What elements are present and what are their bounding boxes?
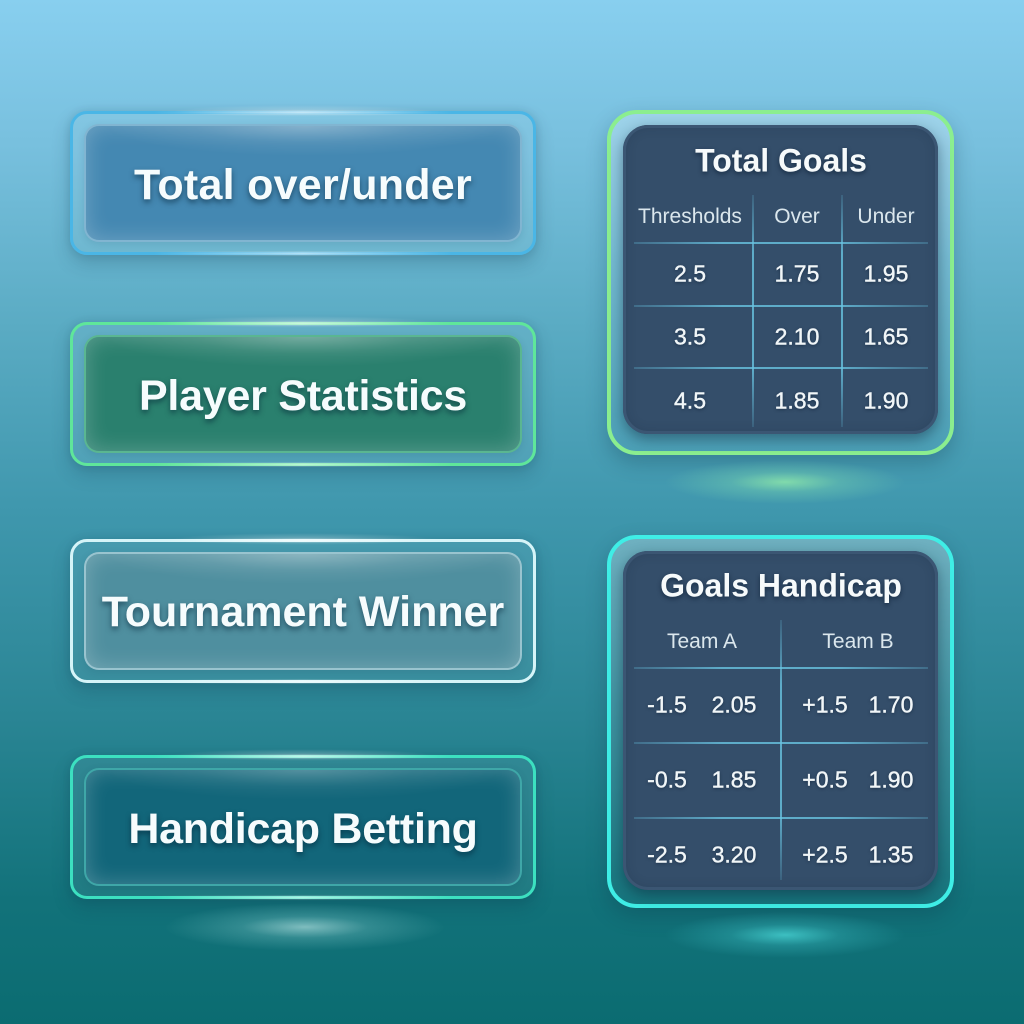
row: 1.5: 1.70 [869, 692, 913, 718]
row: 3.5: 1.65 [864, 324, 908, 350]
header row [638, 205, 915, 228]
row: 2.5 [674, 260, 908, 286]
button: Player Statistics: Player Statistics [139, 372, 467, 420]
button: Total over/under: Total over/under [134, 161, 472, 209]
row: 4.5 [674, 388, 908, 414]
row: 1.5: 2.05 [712, 692, 756, 718]
row: 3.5: 2.10 [775, 324, 819, 350]
row: 0.5: +0.5 [802, 766, 848, 792]
table card: Goals Handicap [607, 535, 954, 908]
row: 2.5: 1.75 [775, 260, 819, 286]
table card: Total Goals [607, 110, 954, 455]
row: 3.5 [674, 324, 908, 350]
row: 2.5: 1.95 [864, 260, 908, 286]
row: 1.5: -1.5 [647, 692, 687, 718]
button: Handicap Betting: Handicap Betting [128, 805, 478, 853]
row: 2.5: -2.5 [647, 842, 687, 868]
row: 4.5: 1.90 [864, 388, 908, 414]
table title: Total Goals: Total Goals [695, 142, 867, 178]
row: 2.5: 3.20 [712, 842, 756, 868]
glow under total goals card [665, 460, 905, 504]
row: 0.5: -0.5 [647, 766, 687, 792]
row: 2.5: 2.5 [674, 260, 706, 286]
row: 4.5: 1.85 [775, 388, 819, 414]
button: Handicap Betting [70, 755, 536, 899]
row: 2.5 [647, 842, 914, 868]
row: 1.5: +1.5 [802, 692, 848, 718]
row: 0.5 [647, 766, 914, 792]
table title: Goals Handicap: Goals Handicap [660, 568, 902, 604]
row: 0.5: 1.90 [869, 766, 913, 792]
table panel: Goals Handicap [623, 551, 938, 890]
row: 3.5: 3.5 [674, 324, 706, 350]
row: 2.5: +2.5 [802, 842, 848, 868]
glow under goals handicap card [665, 912, 905, 958]
header row [667, 630, 894, 653]
row: 2.5: 1.35 [869, 842, 913, 868]
header row: Team B [822, 630, 894, 653]
row: 0.5: 1.85 [712, 766, 756, 792]
header row: Thresholds [638, 205, 742, 228]
button: Total over/under [70, 111, 536, 255]
row: 1.5 [647, 692, 914, 718]
row: 4.5: 4.5 [674, 388, 706, 414]
table panel: Total Goals [623, 125, 938, 434]
button: Tournament Winner [70, 539, 536, 683]
header row: Over [774, 205, 820, 228]
button: Tournament Winner: Tournament Winner [102, 588, 504, 636]
glow under handicap betting [165, 903, 445, 951]
header row: Team A [667, 630, 737, 653]
button: Player Statistics [70, 322, 536, 466]
header row: Under [857, 205, 915, 228]
